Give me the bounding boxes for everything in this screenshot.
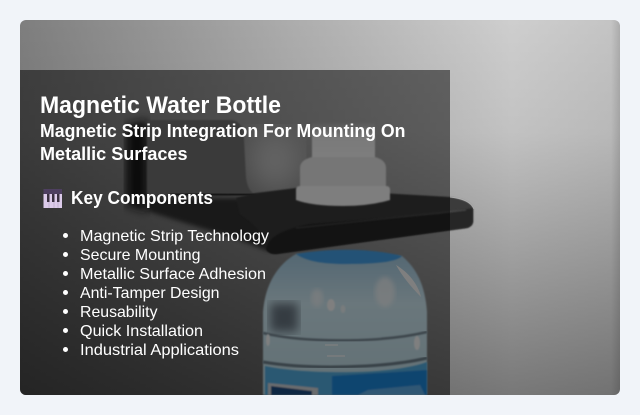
bracket shelf xyxy=(135,188,474,254)
label xyxy=(265,362,427,395)
component list: Metallic Surface Adhesion xyxy=(80,266,266,283)
dark reflection patch xyxy=(270,303,298,332)
bottle xyxy=(263,250,427,395)
text overlay panel xyxy=(20,70,450,395)
component list: Quick Installation xyxy=(80,323,203,340)
component list xyxy=(63,228,269,359)
highlights xyxy=(396,265,421,297)
bullets xyxy=(63,233,68,352)
component list: Anti-Tamper Design xyxy=(80,285,220,302)
bracket back plate xyxy=(126,120,256,212)
component list: Industrial Applications xyxy=(80,342,239,359)
component list: Reusability xyxy=(80,304,158,321)
subtitle: Metallic Surfaces xyxy=(40,144,188,164)
bottle cap xyxy=(296,122,390,206)
subtitle: Magnetic Strip Integration For Mounting On xyxy=(40,121,406,141)
subtitle xyxy=(41,124,404,160)
component list: Magnetic Strip Technology xyxy=(80,228,269,245)
ribs xyxy=(263,332,427,340)
icon: piano keys xyxy=(44,189,62,208)
section heading: Key Components xyxy=(71,188,213,208)
component list: Secure Mounting xyxy=(80,247,200,264)
title: Magnetic Water Bottle xyxy=(40,92,281,119)
